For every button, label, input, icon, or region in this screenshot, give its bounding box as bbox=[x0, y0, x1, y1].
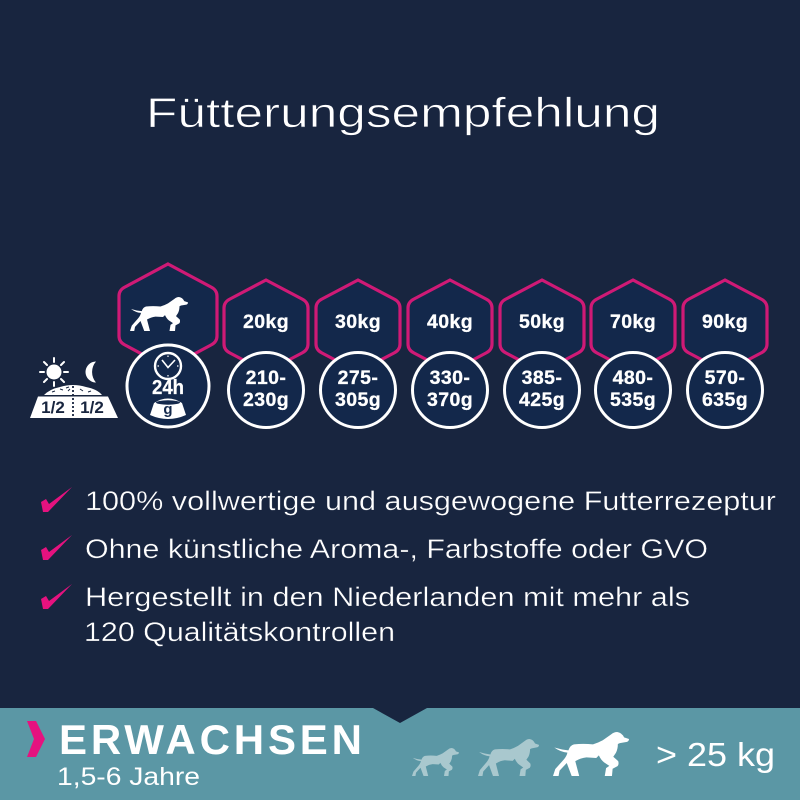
column: 70kg bbox=[591, 280, 675, 428]
hexagon: dog bbox=[119, 264, 217, 368]
icon: medium dog bbox=[478, 739, 539, 776]
column: 40kg: 370g bbox=[427, 389, 473, 411]
column: 70kg: 70kg bbox=[610, 311, 656, 333]
icon: check 3 bbox=[41, 584, 72, 609]
circle: daily amount bbox=[127, 345, 209, 427]
column: 50kg: 425g bbox=[519, 389, 565, 411]
icon: check 1 bbox=[41, 487, 72, 512]
circle: daily amount: g bbox=[163, 401, 173, 418]
benefits list bbox=[41, 486, 776, 647]
column: 30kg: 275- bbox=[338, 367, 378, 389]
column: 20kg bbox=[224, 280, 308, 428]
column: 90kg: 570- bbox=[705, 367, 745, 389]
column: 40kg bbox=[408, 280, 492, 428]
column: 30kg: 30kg bbox=[335, 311, 381, 333]
column: 50kg bbox=[500, 280, 584, 428]
benefit 3 continued: 120 Qualitätskontrollen bbox=[84, 617, 395, 647]
column: 90kg bbox=[683, 280, 767, 428]
column: 50kg: 50kg bbox=[519, 311, 565, 333]
day and night portion icon: 1/2 bbox=[41, 398, 65, 417]
column: 20kg: 210- bbox=[246, 367, 286, 389]
life stage heading: ERWACHSEN bbox=[59, 716, 362, 763]
column: 20kg: 230g bbox=[243, 389, 289, 411]
title: Fütterungsempfehlung bbox=[146, 89, 660, 136]
benefit 2: Ohne künstliche Aroma-, Farbstoffe oder GVO bbox=[85, 534, 708, 564]
circle: daily amount: 24h bbox=[152, 377, 184, 399]
column: 30kg: 305g bbox=[335, 389, 381, 411]
day and night portion icon: 1/2 bbox=[80, 398, 104, 417]
column: 20kg: 20kg bbox=[243, 311, 289, 333]
footer band bbox=[0, 708, 800, 800]
icon: small dog bbox=[412, 748, 459, 776]
column: 90kg: 90kg bbox=[702, 311, 748, 333]
icon: check 2 bbox=[41, 535, 72, 560]
column: 70kg: 480- bbox=[613, 367, 653, 389]
column: 40kg: 40kg bbox=[427, 311, 473, 333]
age range: 1,5-6 Jahre bbox=[57, 763, 200, 791]
column: 30kg bbox=[316, 280, 400, 428]
column: 40kg: 330- bbox=[430, 367, 470, 389]
column: 70kg: 535g bbox=[610, 389, 656, 411]
icon: large dog bbox=[553, 732, 629, 776]
weight label: > 25 kg bbox=[656, 736, 775, 773]
icon: chevron bbox=[27, 721, 45, 757]
benefit 3: Hergestellt in den Niederlanden mit mehr als bbox=[85, 582, 690, 612]
feeding table bbox=[30, 264, 767, 428]
column: 50kg: 385- bbox=[522, 367, 562, 389]
benefit 1: 100% vollwertige und ausgewogene Futterrezeptur bbox=[85, 486, 776, 516]
column: 90kg: 635g bbox=[702, 389, 748, 411]
day and night portion icon bbox=[30, 358, 118, 418]
